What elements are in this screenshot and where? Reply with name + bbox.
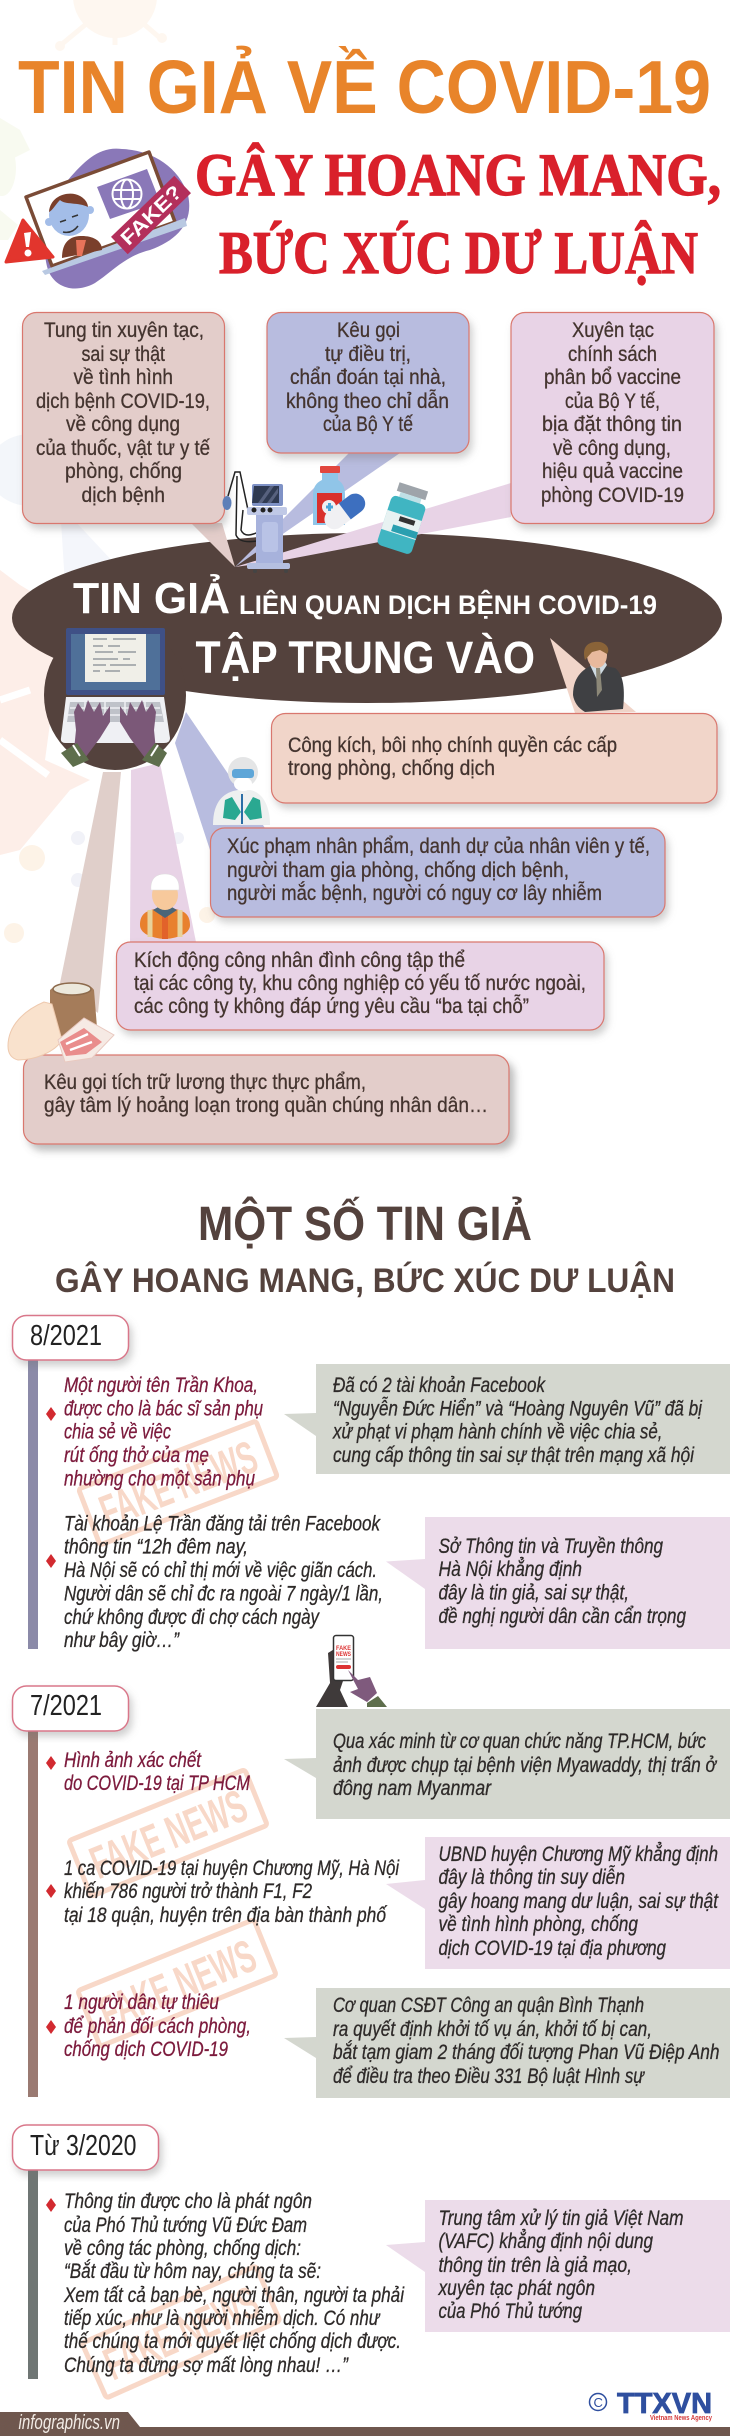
icon: phone with fake news: FAKE xyxy=(336,1645,352,1652)
response: VAFC: của Phó Thủ tướng xyxy=(438,2299,582,2323)
panel: vaccine policy: của Bộ Y tế, xyxy=(565,389,660,413)
fake news stamp: FAKE NEWS xyxy=(92,1430,264,1538)
claim: deputy PM statement: của Phó Thủ tướng Vũ Đức Đam xyxy=(64,2213,307,2237)
claim: deputy PM statement: thế chúng ta mới quyết liệt chống dịch được. xyxy=(64,2329,401,2353)
response: VAFC: xuyên tạc phát ngôn xyxy=(438,2276,595,2300)
claim: self immolation xyxy=(46,1990,251,2061)
fake news stamp: FAKE NEWS xyxy=(92,1929,263,2039)
date label 7/2021 xyxy=(12,1686,128,1731)
response: Chuong My district: dịch COVID-19 tại địa phương xyxy=(438,1936,666,1960)
panel: insulting medical staff: người mắc bệnh, người có nguy cơ lây nhiễm xyxy=(227,880,602,905)
response: Binh Thanh police: ra quyết định khởi tố vụ án, khởi tố bị can, xyxy=(333,2017,652,2041)
panel: vaccine policy: Xuyên tạc xyxy=(572,318,654,342)
panel: self treatment: của Bộ Y tế xyxy=(323,412,413,436)
response: VAFC: thông tin trên là giả mạo, xyxy=(438,2253,632,2277)
fake news stamp: FAKE NEWS xyxy=(96,2276,267,2390)
claim: Hanoi lockdown: Hà Nội sẽ có chỉ thị mới về việc giãn cách. xyxy=(64,1558,377,1582)
response: VAFC xyxy=(386,2200,730,2332)
background virus decoration xyxy=(0,0,215,943)
claim: deputy PM statement xyxy=(46,2189,405,2377)
claim: deputy PM statement: Chúng ta đừng sợ mất lòng nhau! …” xyxy=(64,2353,349,2377)
heading in ellipse: LIÊN QUAN DỊCH BỆNH COVID-19 xyxy=(239,589,657,620)
panel: worker strikes: tại các công ty, khu công nghiệp có yếu tố nước ngoài, xyxy=(134,971,586,995)
icon: medical worker xyxy=(213,757,270,825)
panel: misinformation on treatment: về công dụng xyxy=(66,412,180,436)
panel: food hoarding: gây tâm lý hoảng loạn trong quần chúng nhân dân… xyxy=(44,1093,488,1117)
heading in ellipse: TẬP TRUNG VÀO xyxy=(196,632,535,683)
heading in ellipse: TIN GIẢ xyxy=(73,573,230,623)
icon: businessman xyxy=(573,642,624,712)
response: Chuong My district xyxy=(386,1837,730,1969)
claim: Hanoi lockdown: thông tin “12h đêm nay, xyxy=(64,1535,248,1559)
panel: attacks on authorities: Công kích, bôi nhọ chính quyền các cấp xyxy=(288,733,617,757)
response: Myawaddy hospital xyxy=(284,1709,730,1819)
date label 3/2020: Từ 3/2020 xyxy=(30,2130,136,2162)
fake tag: FAKE? xyxy=(117,181,187,250)
claim: Chuong My F1: 1 ca COVID-19 tại huyện Chương Mỹ, Hà Nội xyxy=(64,1856,400,1880)
panel: self treatment: chẩn đoán tại nhà, xyxy=(290,365,446,389)
claim: corpses image xyxy=(46,1748,250,1795)
panel: vaccine policy xyxy=(511,312,714,524)
claim: self immolation: 1 người dân tự thiêu xyxy=(64,1990,219,2014)
response: facebook accounts fined: Đã có 2 tài khoản Facebook xyxy=(333,1373,546,1397)
fake news stamp xyxy=(79,1421,277,1545)
panel: misinformation on treatment: về tình hình xyxy=(74,365,173,389)
response: Binh Thanh police: Cơ quan CSĐT Công an quận Bình Thạnh xyxy=(333,1993,644,2017)
date label 7/2021: 7/2021 xyxy=(30,1690,102,1722)
icon: medicine bottle xyxy=(313,466,369,533)
panel: misinformation on treatment: dịch bệnh COVID-19, xyxy=(36,389,210,413)
panel: vaccine policy: phòng COVID-19 xyxy=(541,483,684,507)
panel: misinformation on treatment: Tung tin xuyên tạc, xyxy=(44,318,204,342)
fake news stamp xyxy=(69,1770,267,1896)
panel: misinformation on treatment: phòng, chống xyxy=(65,459,182,483)
icon: fake news laptop xyxy=(6,149,191,289)
panel: misinformation on treatment: của thuốc, vật tư y tế xyxy=(36,436,210,460)
warning triangle xyxy=(6,220,53,262)
timeline bar 7/2021 xyxy=(28,1729,38,2097)
central ellipse xyxy=(12,533,722,770)
logo: TTXVN: TTXVN xyxy=(617,2388,712,2420)
panel: self treatment: Kêu gọi xyxy=(337,318,400,342)
panel: insulting medical staff: Xúc phạm nhân phẩm, danh dự của nhân viên y tế, xyxy=(227,834,650,858)
panel: vaccine policy: phân bổ vaccine xyxy=(544,365,681,389)
panel: worker strikes: Kích động công nhân đình công tập thể xyxy=(134,948,465,972)
icon: vaccine vial xyxy=(376,481,431,555)
section heading: MỘT SỐ TIN GIẢ xyxy=(198,1196,532,1251)
icon: phone with fake news xyxy=(316,1636,387,1707)
claim: self immolation: để phản đối cách phòng, xyxy=(64,2014,251,2038)
date label 8/2021: 8/2021 xyxy=(30,1320,102,1352)
response: Hanoi department: Sở Thông tin và Truyền thông xyxy=(438,1534,663,1558)
claim: Hanoi lockdown xyxy=(46,1512,383,1652)
panel: food hoarding xyxy=(24,1055,509,1144)
response: Chuong My district: đây là thông tin suy diễn xyxy=(438,1863,625,1889)
timeline bar 8/2021 xyxy=(28,1358,38,1649)
panel: attacks on authorities xyxy=(272,714,717,803)
response: Hanoi department: Hà Nội khẳng định xyxy=(438,1556,582,1581)
response: Binh Thanh police: để điều tra theo Điều 331 Bộ luật Hình sự xyxy=(333,2064,645,2088)
claim: deputy PM statement: “Bắt đầu từ hôm nay, chúng ta sẽ: xyxy=(64,2258,321,2283)
panel: vaccine policy: về công dụng, xyxy=(553,436,671,460)
panel: attacks on authorities: trong phòng, chống dịch xyxy=(288,756,495,780)
panel: insulting medical staff: người tham gia phòng, chống dịch bệnh, xyxy=(227,858,569,882)
claim: Chuong My F1: khiến 786 người trở thành F1, F2 xyxy=(64,1879,312,1903)
claim: doctor story: được cho là bác sĩ sản phụ xyxy=(64,1396,263,1420)
claim: deputy PM statement: Thông tin được cho là phát ngôn xyxy=(64,2189,312,2213)
response: VAFC: (VAFC) khẳng định nội dung xyxy=(438,2228,653,2253)
response: Binh Thanh police xyxy=(284,1988,730,2098)
claim: doctor story: chia sẻ về việc xyxy=(64,1420,171,1444)
response: Chuong My district: về tình hình phòng, chống xyxy=(438,1912,638,1936)
icon: ventilator xyxy=(222,472,290,573)
fake news stamp xyxy=(82,2266,280,2398)
fake news stamp: FAKE NEWS xyxy=(83,1779,254,1889)
panel: vaccine policy: bịa đặt thông tin xyxy=(542,412,682,436)
logo: TTXVN: C xyxy=(594,2395,603,2410)
fake news stamp xyxy=(78,1920,276,2046)
section heading: GÂY HOANG MANG, BỨC XÚC DƯ LUẬN xyxy=(55,1262,675,1300)
claim: self immolation: chống dịch COVID-19 xyxy=(64,2037,228,2061)
claim: Hanoi lockdown: Người dân sẽ chỉ đc ra ngoài 7 ngày/1 lần, xyxy=(64,1581,383,1605)
icon: food xyxy=(8,982,114,1062)
icon: phone with fake news: NEWS xyxy=(336,1651,352,1658)
panel: insulting medical staff xyxy=(210,828,665,917)
footer bar: infographics.vn xyxy=(18,2412,120,2434)
ray pointers xyxy=(60,453,636,1013)
fake tag xyxy=(111,176,191,254)
heading in ellipse xyxy=(73,573,657,683)
date label 8/2021 xyxy=(12,1316,128,1360)
claim: Hanoi lockdown: chứ không được đi chợ cách ngày xyxy=(64,1605,320,1629)
panel: vaccine policy: chính sách xyxy=(568,342,657,366)
claim: doctor story: rút ống thở của mẹ xyxy=(64,1443,209,1467)
panel: vaccine policy: hiệu quả vaccine xyxy=(542,459,683,483)
panel: food hoarding: Kêu gọi tích trữ lương thực thực phẩm, xyxy=(44,1070,366,1094)
claim: Hanoi lockdown: như bây giờ…” xyxy=(64,1628,180,1652)
claim: deputy PM statement: tiếp xúc, như là người nhiễm dịch. Có như xyxy=(64,2304,381,2330)
panel: self treatment: không theo chỉ dẫn xyxy=(286,388,449,413)
icon: construction worker xyxy=(140,874,190,939)
date label 3/2020 xyxy=(12,2125,158,2170)
response: Hanoi department xyxy=(386,1517,730,1649)
claim: doctor story xyxy=(46,1373,263,1490)
timeline bar 3/2020 xyxy=(28,2168,38,2379)
response: Hanoi department: đây là tin giả, sai sự thật, xyxy=(438,1580,629,1604)
claim: doctor story: Một người tên Trần Khoa, xyxy=(64,1373,258,1397)
claim: doctor story: nhường cho một sản phụ xyxy=(64,1466,255,1490)
claim: Chuong My F1: tại 18 quận, huyện trên địa bàn thành phố xyxy=(64,1903,388,1927)
claim: deputy PM statement: về công tác phòng, chống dịch: xyxy=(64,2236,301,2260)
response: Myawaddy hospital: đông nam Myanmar xyxy=(333,1776,492,1800)
panel: worker strikes: các công ty không đáp ứng yêu cầu “ba tại chỗ” xyxy=(134,993,529,1018)
logo: TTXVN: Vietnam News Agency xyxy=(650,2415,712,2422)
panel: self treatment: tự điều trị, xyxy=(325,342,411,366)
panel: misinformation on treatment: sai sự thật xyxy=(82,342,165,366)
claim: corpses image: Hình ảnh xác chết xyxy=(64,1748,202,1772)
section heading xyxy=(55,1196,675,1300)
panel: misinformation on treatment xyxy=(22,312,224,524)
claim: deputy PM statement: Xem tất cả bạn bè, người thân, người ta phải xyxy=(63,2283,405,2307)
footer bar xyxy=(0,2412,730,2436)
claim: corpses image: do COVID-19 tại TP HCM xyxy=(64,1771,250,1795)
response: facebook accounts fined xyxy=(284,1364,730,1474)
panel: worker strikes xyxy=(116,942,604,1030)
panel: self treatment xyxy=(267,312,469,453)
subtitle xyxy=(195,142,721,286)
panel: misinformation on treatment: dịch bệnh xyxy=(82,483,165,507)
icon: laptop with hands xyxy=(61,628,170,767)
claim: Hanoi lockdown: Tài khoản Lệ Trần đăng tải trên Facebook xyxy=(64,1512,381,1536)
claim: Chuong My F1 xyxy=(46,1856,400,1927)
